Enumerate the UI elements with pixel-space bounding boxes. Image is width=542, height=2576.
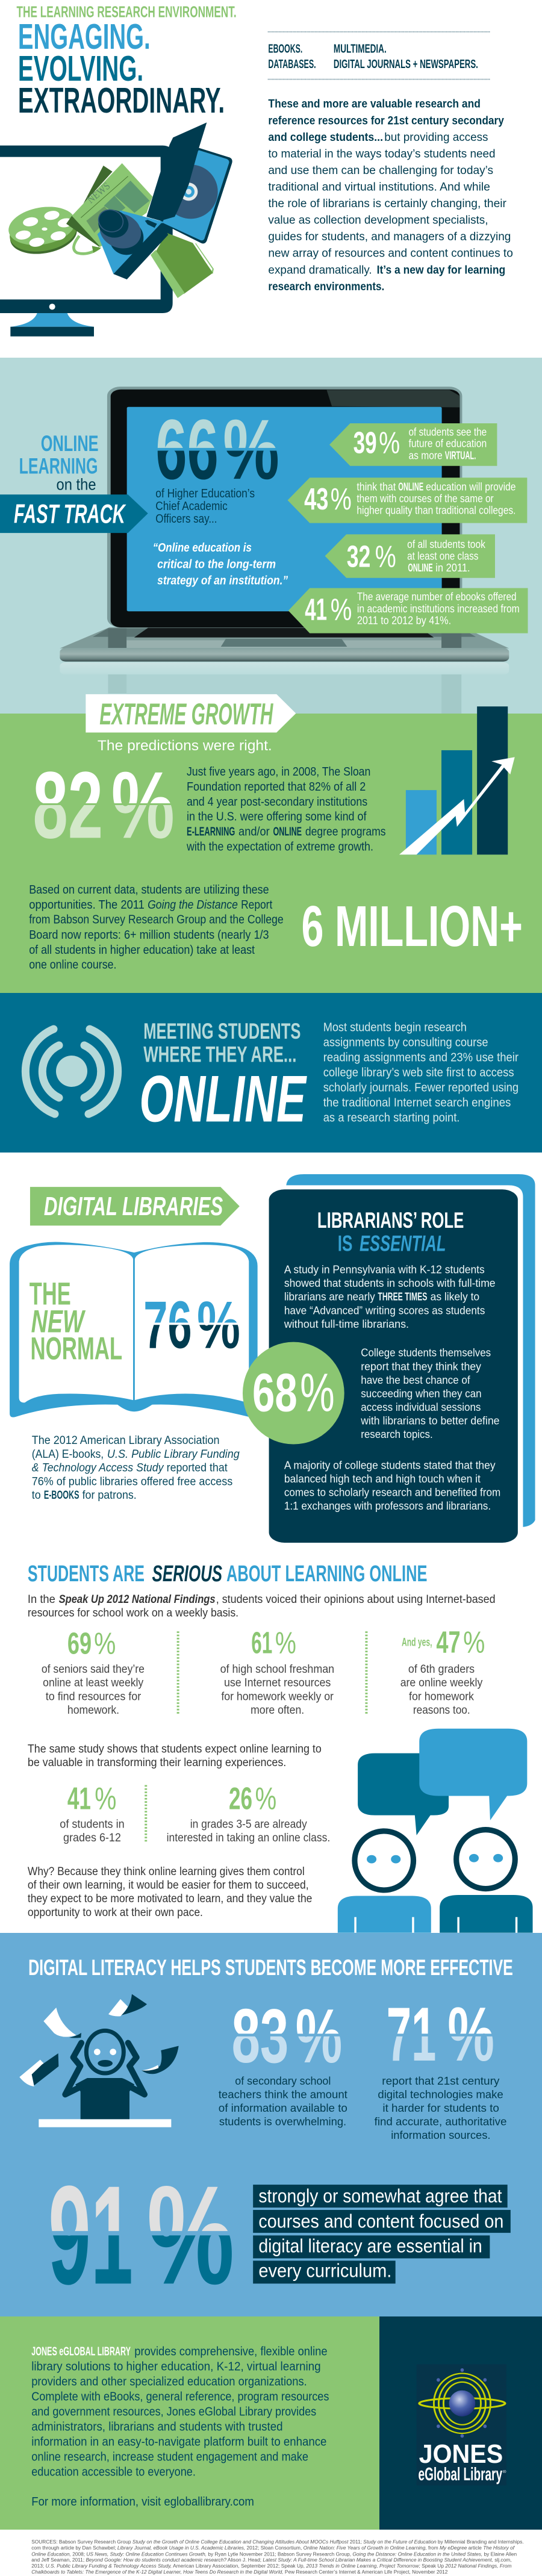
green tag: 41 percent: % [331, 593, 352, 626]
panel: digital libraries and librarians: % [197, 1287, 240, 1363]
text: digital technologies [375, 2074, 506, 2141]
stat: 91 percent split figure: 91 [48, 2157, 133, 2314]
text: digital technologies: information sources. [391, 2129, 491, 2141]
text: about Jones eGlobal Library [31, 2344, 329, 2509]
background: dark logo panel [379, 2316, 542, 2530]
stat: and yes 47 percent: 47 [436, 1625, 461, 1659]
text: same study: The same study shows that students expect online learning to [28, 1743, 322, 1755]
icon: overwhelmed student with flying papers [19, 1994, 179, 2127]
heading: online learning on the [19, 431, 99, 494]
stat: and yes 47 percent: % [463, 1625, 485, 1659]
text: sources: com through article by Dan Schawbel; Library Journal, eBook Usage in U.S. Academic Libraries, 2012; Sloan Consortium, Online Nation: Five Years of Growth in Online Learning, from My eDegree article The History of [31, 2545, 515, 2551]
heading: the new normal: THE [30, 1277, 71, 1311]
panel: online learning fast track [0, 387, 528, 633]
stat: 83 percent split figure [233, 2009, 341, 2063]
text: sources [31, 2539, 524, 2575]
logo: Jones eGlobal Library: JONES [419, 2439, 503, 2468]
title: engaging evolving extraordinary: ENGAGING. [18, 17, 151, 57]
intro paragraph: research environments. [268, 280, 384, 293]
stat: and yes 47 percent: And yes, [402, 1636, 432, 1649]
logo: Jones eGlobal Library: ® [503, 2470, 506, 2474]
bar chart with arrow [399, 706, 515, 854]
icon: speech bubbles [358, 1729, 527, 1835]
green tag: 32 percent: % [375, 540, 396, 573]
text: ALA study [32, 1434, 240, 1502]
stat: 66 percent split figure: 66 [155, 402, 219, 497]
text: Sloan Foundation: Foundation reported that 82% of all 2 [187, 779, 366, 794]
text: Sloan Foundation: Just five years ago, in 2008, The Sloan [187, 764, 370, 779]
text: Babson report: of all students in higher education) take at least [29, 942, 255, 957]
text: about Jones eGlobal Library: providers and other specialized education organizations. [31, 2375, 307, 2389]
heading: students are serious about learning online: STUDENTS ARE [28, 1561, 145, 1586]
text: about Jones eGlobal Library: library solutions to higher education, K-12, virtual learning [31, 2360, 321, 2374]
icon: student left [338, 1828, 431, 1933]
text: why online learning: of their own learning, it would be easier for them to succeed, [28, 1879, 309, 1891]
quote: “Online education is [153, 540, 252, 555]
green tag: 39 percent [329, 423, 497, 466]
text: ALA study: for patrons. [83, 1489, 137, 1502]
green tag: 43 percent: think that [357, 481, 396, 493]
badge: 68 percent: 68 [252, 1363, 297, 1423]
text: Pennsylvania study: librarians are nearly [284, 1290, 375, 1303]
stat: 91 percent split figure: % [147, 2157, 234, 2314]
stat: 71 percent split figure: 71 [387, 1992, 436, 2077]
stat: 26 percent: in grades 3-5 are already [190, 1818, 307, 1831]
text: Babson report: Board now reports: 6+ million students (nearly 1/3 [29, 927, 269, 942]
heading: librarians role is essential: IS [338, 1231, 352, 1255]
panel: meeting students online: MEETING STUDENTS [143, 1019, 301, 1044]
stat: 91 percent split figure: % [147, 2157, 234, 2314]
text: Sloan Foundation: degree programs [305, 824, 386, 838]
title: engaging evolving extraordinary: EVOLVING. [18, 49, 143, 89]
text: Sloan Foundation: ONLINE [273, 824, 302, 838]
text: Sloan Foundation: and/or [238, 824, 270, 838]
stat: 76 percent split figure [145, 1301, 239, 1349]
stat: and yes 47 percent: reasons too. [413, 1703, 470, 1717]
text: same study [28, 1743, 322, 1769]
intro paragraph: expand dramatically. [268, 264, 372, 276]
text: chief academic officers: Chief Academic [155, 500, 228, 513]
text: ALA study: The 2012 American Library Association [32, 1434, 219, 1447]
stat: 83 percent split figure: 83 [232, 1993, 288, 2079]
green tag: 43 percent: % [331, 482, 352, 516]
intro paragraph: and college students... [268, 131, 383, 144]
stat: 69 percent [42, 1626, 145, 1717]
arrow label: digital libraries: DIGITAL LIBRARIES [44, 1192, 223, 1221]
text: Babson report: Report [241, 897, 273, 912]
panel: digital libraries and librarians: % [197, 1287, 240, 1363]
stat: 61 percent: use Internet resources [224, 1676, 331, 1689]
green tag: 39 percent: future of education [408, 437, 487, 450]
green tag: 32 percent: in 2011. [435, 562, 470, 574]
highlighted statement [253, 2185, 511, 2283]
text: ALA study: reported that [167, 1461, 228, 1474]
stat: 83 percent split figure: 83 [232, 1993, 288, 2079]
stat: 69 percent: of seniors said they’re [42, 1663, 145, 1676]
text: Pennsylvania study: THREE TIMES [378, 1290, 427, 1303]
stat: 61 percent: more often. [251, 1703, 304, 1717]
stat: 76 percent split figure: 76 [143, 1287, 192, 1363]
text: Sloan Foundation: and 4 year post-secondary institutions [187, 794, 367, 808]
green tag: 41 percent: 2011 to 2012 by 41%. [357, 614, 451, 626]
stat: 69 percent: online at least weekly [43, 1676, 144, 1689]
text: ALA study: & Technology Access Study [32, 1461, 164, 1474]
text: why online learning: Why? Because they think online learning gives them control [28, 1865, 305, 1878]
stat: 61 percent: % [275, 1625, 296, 1660]
text: Pennsylvania study [284, 1263, 496, 1330]
subheading: The predictions were right. [98, 737, 272, 753]
quote: strategy of an institution.” [157, 573, 288, 587]
green tag: 43 percent: 43 [304, 482, 328, 516]
text: about Jones eGlobal Library: administrators, librarians and students with trusted [31, 2419, 283, 2433]
text: college students themselves [361, 1346, 499, 1440]
panel: online learning fast track: % [223, 402, 279, 497]
panel: digital libraries and librarians [10, 1174, 535, 1543]
dotted divider bottom [268, 78, 490, 81]
panel: meeting students online: ONLINE [139, 1062, 307, 1136]
resource list: EBOOKS. [268, 42, 302, 55]
green tag: 39 percent: % [379, 426, 400, 459]
text: college students themselves: research topics. [361, 1428, 433, 1440]
text: college students themselves: have the best chance of [361, 1374, 470, 1386]
panel: 91 percent and Jones footer [31, 2157, 524, 2575]
text: ALA study: (ALA) E-books, [32, 1448, 104, 1461]
green tag: 32 percent: of all students took [407, 538, 485, 550]
text: same study: be valuable in transforming their learning experiences. [28, 1756, 286, 1769]
text: about Jones eGlobal Library: information in an easy-to-navigate platform built to enhance [31, 2435, 326, 2448]
stat: 41 percent: grades 6-12 [63, 1832, 121, 1844]
text: speak up findings: In the [28, 1593, 55, 1606]
text: secondary school teachers: of secondary school [235, 2074, 331, 2087]
stat: 66 percent split figure: 66 [155, 402, 219, 497]
stat: 26 percent: % [255, 1781, 276, 1816]
logo: Jones eGlobal Library [417, 2364, 506, 2486]
highlighted statement: every curriculum. [258, 2260, 391, 2281]
text: research starting points [323, 1020, 519, 1124]
resource list: MULTIMEDIA. [334, 42, 387, 55]
text: sources: SOURCES: Babson Survey Research Group Study on the Growth of Online College Education and Changing Attitudes About MOOCs Huffpost 2011; Study on the Future of Education by Millennial Branding and Internships. [31, 2539, 524, 2545]
icon: online signal [25, 1029, 118, 1114]
panel: students are serious [28, 1561, 527, 1844]
green tag: 41 percent [288, 588, 528, 633]
text: chief academic officers: Officers say... [155, 512, 217, 526]
green tag: 32 percent: ONLINE [408, 562, 433, 574]
heading: students are serious about learning online: SERIOUS [152, 1561, 222, 1586]
text: Pennsylvania study: as likely to [431, 1290, 479, 1303]
heading: the new normal: NEW [31, 1304, 86, 1339]
text: sources: Online Education, 2008; US News, Study: Online Education Continues Growth, by Ryan Lytle November 2011; Babson Survey Research Group, Going the Distance: Online Education in the United States, by Elaine Allen [31, 2551, 517, 2557]
text: chief academic officers [155, 487, 255, 526]
text: Babson report [29, 882, 284, 971]
text: about Jones eGlobal Library: Complete with eBooks, general reference, program resources [31, 2390, 329, 2404]
stat: and yes 47 percent [400, 1625, 485, 1717]
text: Sloan Foundation: E-LEARNING [187, 824, 235, 838]
panel: extreme growth: % [111, 752, 175, 858]
heading: meeting students where they are [143, 1019, 301, 1066]
arrow label: digital libraries [30, 1187, 240, 1225]
stat: 61 percent: for homework weekly or [221, 1690, 334, 1703]
stat: 91 percent split figure: 91 [48, 2157, 133, 2314]
stat: 26 percent: interested in taking an online class. [167, 1832, 330, 1844]
panel: meeting students online: WHERE THEY ARE... [143, 1042, 296, 1066]
panel: why and figures [28, 1827, 533, 2141]
title: engaging evolving extraordinary [18, 17, 225, 120]
arrow label: fast track: FAST TRACK [14, 499, 126, 529]
text: secondary school teachers: of information available to [219, 2102, 347, 2114]
stat: and yes 47 percent: are online weekly [400, 1676, 483, 1689]
text: Pennsylvania study: without full-time librarians. [284, 1318, 409, 1330]
intro paragraph [268, 98, 513, 293]
text: Sloan Foundation: in the U.S. were offering some kind of [187, 809, 367, 823]
background: blue digital literacy band [0, 1933, 542, 2316]
panel: online learning fast track: % [223, 402, 279, 497]
text: why online learning: they expect to be more motivated to learn, and they value the [28, 1893, 312, 1905]
laptop lid and screen [107, 387, 462, 627]
panel: librarians role card [269, 1174, 535, 1543]
icon: open book [10, 1242, 258, 1417]
stat: and yes 47 percent: of 6th graders [408, 1663, 475, 1676]
text: about Jones eGlobal Library: education accessible to everyone. [31, 2465, 196, 2479]
background: dark teal meeting students band [0, 993, 542, 1153]
panel: extreme growth: EXTREME GROWTH [99, 698, 273, 731]
text: Sloan Foundation: with the expectation of extreme growth. [186, 839, 373, 853]
green tag: 32 percent: at least one class [407, 550, 478, 562]
text: secondary school teachers: students is overwhelming. [219, 2115, 346, 2128]
intro paragraph: but providing access [384, 131, 488, 144]
panel: online learning fast track: LEARNING [19, 453, 98, 478]
green tag: 39 percent: VIRTUAL. [445, 449, 476, 462]
green tag: 32 percent: 32 [347, 540, 370, 573]
text: speak up findings [28, 1593, 496, 1619]
text: about Jones eGlobal Library: online research, increase student engagement and make [31, 2450, 308, 2464]
stat: 82 percent split figure: 82 [33, 752, 103, 858]
badge: 68 percent: % [300, 1363, 335, 1423]
icon: student right [440, 1827, 533, 1933]
stat: 82 percent split figure: 82 [33, 752, 103, 858]
panel: hero header: EXTRAORDINARY. [18, 81, 225, 120]
panel: online learning fast track: ONLINE [41, 431, 99, 456]
background: green extreme growth band [0, 714, 542, 993]
panel: why and figures: % [296, 1993, 342, 2079]
stat: 41 percent: % [95, 1781, 116, 1816]
text: Sloan Foundation [186, 764, 386, 853]
stat: and yes 47 percent: for homework [409, 1690, 475, 1703]
text: about Jones eGlobal Library: JONES eGLOBAL LIBRARY [31, 2344, 131, 2358]
illustration: monitor with media [0, 122, 232, 337]
heading: the new normal [30, 1277, 122, 1366]
stat: 26 percent [167, 1781, 330, 1844]
text: Babson report: Going the Distance [148, 897, 238, 912]
green tag: 39 percent: as more [408, 449, 443, 462]
text: ALA study: 76% of public libraries offered free access [32, 1475, 232, 1488]
stat: 76 percent split figure: 76 [143, 1287, 192, 1363]
green tag: 39 percent: 39 [354, 426, 377, 459]
green tag: 41 percent: 41 [305, 593, 327, 626]
panel: digital libraries and librarians: NORMAL [31, 1331, 122, 1366]
heading: librarians role is essential: ESSENTIAL [360, 1231, 446, 1255]
text: why online learning: opportunity to work at their own pace. [28, 1906, 203, 1918]
stat: 41 percent [60, 1781, 125, 1844]
heading: librarians role is essential [317, 1208, 464, 1255]
green tag: 43 percent [288, 478, 527, 523]
stat: 69 percent: % [94, 1626, 116, 1660]
stat: 82 percent split figure [35, 771, 173, 839]
panel: hero header [17, 4, 513, 293]
heading: online learning on the: on the [57, 476, 96, 494]
illustration: monitor with media: NEWS [85, 180, 112, 205]
text: about Jones eGlobal Library: provides comprehensive, flexible online [134, 2344, 328, 2358]
resource list: DATABASES. [268, 58, 316, 71]
heading: students are serious about learning online [28, 1561, 427, 1586]
text: Babson report: Based on current data, students are utilizing these [29, 882, 269, 897]
stat: 41 percent: 41 [67, 1781, 91, 1816]
laptop base and reflection [60, 627, 509, 714]
dotted divider top [268, 30, 490, 33]
stat: 91 percent split figure [51, 2185, 232, 2285]
stat: 69 percent: 69 [67, 1626, 92, 1660]
text: ALA study: E-BOOKS [44, 1489, 79, 1502]
text: ALA study: to [32, 1489, 41, 1502]
text: Babson report: one online course. [29, 957, 116, 971]
green tag: 32 percent [325, 534, 495, 578]
text: why online learning [28, 1865, 312, 1918]
text: sources: Chalkboards to Tablets: The Emergence of the K-12 Digital Learner, How Teens Do Research in the Digital World, Pew Research Center’s Internet & American Life Project, November 2012 [31, 2569, 448, 2575]
resource list [268, 42, 478, 71]
stat: 61 percent: 61 [251, 1625, 272, 1660]
text: Babson report: from Babson Survey Research Group and the College [29, 912, 284, 926]
panel: extreme growth [29, 694, 523, 971]
stat: 69 percent: homework. [67, 1703, 119, 1717]
stat: 69 percent: to find resources for [46, 1690, 141, 1703]
text: secondary school teachers [219, 2074, 347, 2128]
green tag: 43 percent: ONLINE [398, 481, 423, 493]
text: secondary school teachers: teachers think the amount [219, 2088, 347, 2100]
text: about Jones eGlobal Library: For more information, visit egloballibrary.com [31, 2495, 254, 2509]
stat: 71 percent split figure: 71 [387, 1992, 436, 2077]
stat: 41 percent: of students in [60, 1818, 125, 1831]
arrow label: fast track [0, 494, 148, 533]
text: speak up findings: resources for school work on a weekly basis. [28, 1607, 238, 1619]
stat: 66 percent split figure [158, 419, 278, 479]
panel: meeting students online [139, 1019, 519, 1136]
quote [153, 540, 288, 587]
background: green Jones footer band [0, 2316, 379, 2530]
panel: extreme growth: % [111, 752, 175, 858]
text: sources: 2013; U.S. Public Library Funding & Technology Access Study, American Library Association, September 2012; Speak Up, 2013 Trends in Online Learning, Project Tomorrow; Speak Up 2012 National Findings, From [31, 2563, 512, 2569]
text: ALA study: U.S. Public Library Funding [107, 1448, 240, 1461]
background: teal online learning band [0, 358, 542, 714]
badge: 68 percent [243, 1342, 344, 1445]
stat: 61 percent: of high school freshman [220, 1663, 334, 1676]
stat: 61 percent [220, 1625, 334, 1717]
text: about Jones eGlobal Library: and government resources, Jones eGlobal Library provides [31, 2405, 316, 2419]
arrow label: extreme growth [86, 694, 296, 732]
text: speak up findings: Speak Up 2012 National Findings [59, 1593, 216, 1606]
panel: why and figures: % [296, 1993, 342, 2079]
text: Babson report: opportunities. The 2011 [29, 897, 145, 912]
stat: 26 percent: 26 [229, 1781, 252, 1816]
text: chief academic officers: of Higher Education’s [155, 487, 255, 500]
text: high tech and high touch [284, 1459, 500, 1512]
panel: hero header: THE LEARNING RESEARCH ENVIRONMENT. [17, 4, 237, 21]
quote: critical to the long-term [157, 556, 276, 571]
